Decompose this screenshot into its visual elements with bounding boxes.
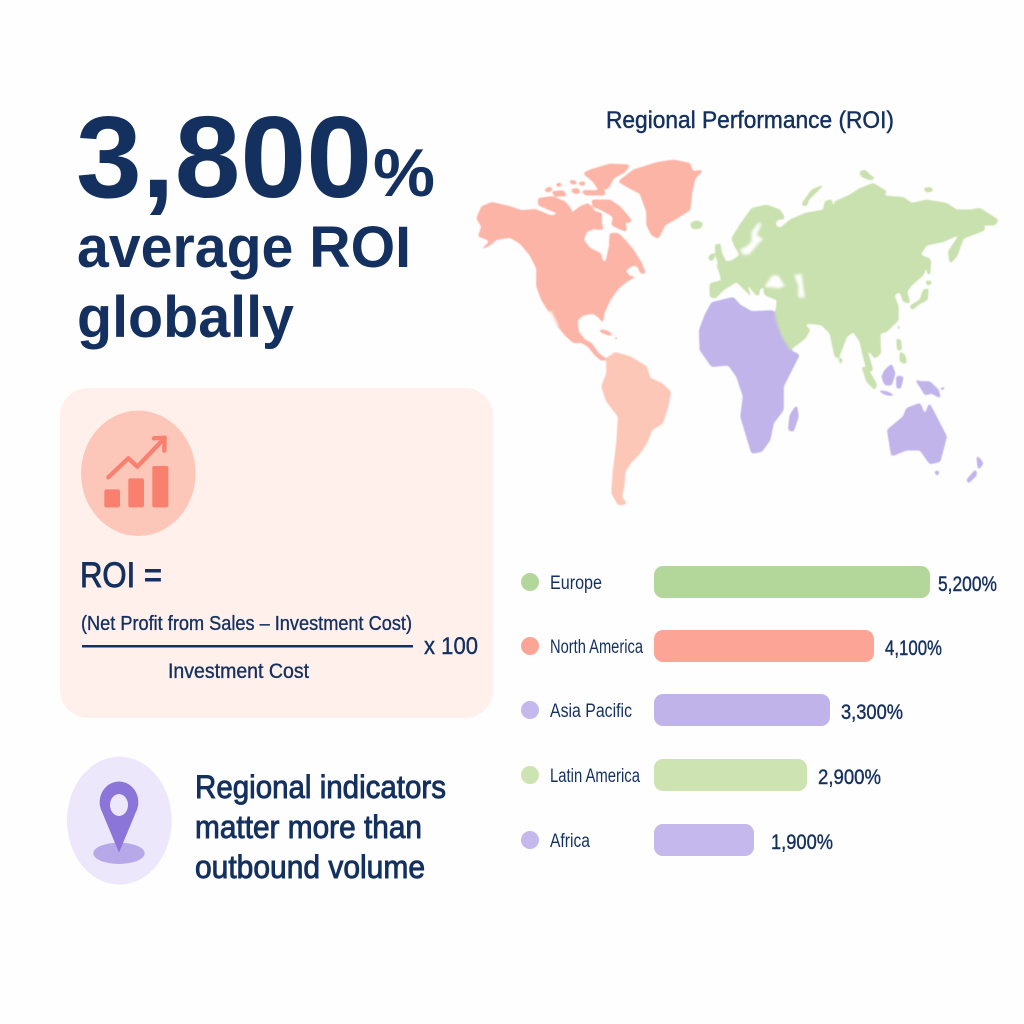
formula numerator: (Net Profit from Sales – Investment Cost) xyxy=(81,613,412,635)
headline: 3,800% average ROI globally xyxy=(76,92,435,350)
Africa, Oceania xyxy=(699,297,983,483)
icon: location pin xyxy=(67,757,172,885)
row: Africa xyxy=(521,824,833,856)
formula multiplier: x 100 xyxy=(424,633,478,660)
North America xyxy=(477,160,703,361)
callout text: Regional indicators xyxy=(195,769,446,805)
row: Europe: 5,200% xyxy=(938,573,997,596)
row: Latin America: Latin America xyxy=(550,766,640,787)
map: the Americas xyxy=(477,160,703,505)
inland seas xyxy=(740,223,805,297)
chart title: Regional Performance (ROI) xyxy=(606,107,894,134)
row: North America: 4,100% xyxy=(885,637,942,660)
row: Asia Pacific xyxy=(521,694,903,726)
bar chart: regional ROI xyxy=(521,566,997,856)
panel: ROI formula xyxy=(60,388,493,718)
row: North America: North America xyxy=(550,637,643,658)
callout: regional indicators xyxy=(67,757,446,885)
headline: 3,800% average ROI globally: 3,800 xyxy=(76,92,372,222)
icon: rising bar chart xyxy=(81,411,196,536)
formula denominator: Investment Cost xyxy=(168,660,309,683)
headline: 3,800% average ROI globally: average ROI xyxy=(77,215,411,280)
row: Europe: Europe xyxy=(550,573,602,594)
headline: 3,800% average ROI globally: % xyxy=(373,135,435,211)
row: Europe xyxy=(521,566,997,598)
formula label: ROI = xyxy=(80,556,162,595)
callout: regional indicators: outbound volume xyxy=(195,849,425,885)
world map xyxy=(477,160,998,505)
South America xyxy=(602,352,671,505)
Eurasia xyxy=(690,170,998,390)
row: Latin America xyxy=(521,759,881,791)
row: Africa: Africa xyxy=(550,831,590,852)
row: Asia Pacific: Asia Pacific xyxy=(550,701,632,722)
row: North America xyxy=(521,630,942,662)
map: Europe, Asia, Africa, Oceania xyxy=(690,170,998,483)
callout: regional indicators: matter more than xyxy=(195,809,422,845)
row: Latin America: 2,900% xyxy=(818,766,881,789)
row: Asia Pacific: 3,300% xyxy=(841,701,903,724)
Gulf of California xyxy=(548,311,559,328)
row: Africa: 1,900% xyxy=(771,831,833,854)
headline: 3,800% average ROI globally: globally xyxy=(77,285,294,350)
